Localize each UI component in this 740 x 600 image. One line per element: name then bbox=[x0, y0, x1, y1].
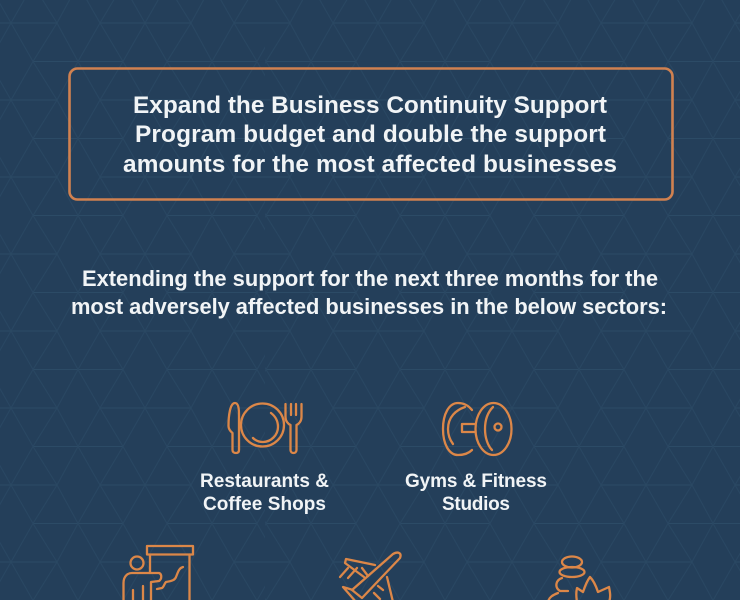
icon: plate with knife and fork bbox=[228, 403, 302, 453]
callout heading text: Program budget and double the support bbox=[135, 121, 606, 148]
icon: spa stones and lotus bbox=[548, 556, 610, 600]
label: Coffee Shops bbox=[203, 494, 326, 515]
label: Restaurants & bbox=[200, 471, 329, 492]
panel: main recommendation callout bbox=[70, 68, 672, 200]
label: Gyms & Fitness bbox=[405, 471, 547, 492]
sector: restaurants and coffee shops bbox=[200, 403, 329, 515]
icon: presenter with chart board bbox=[124, 546, 193, 600]
subheading text: most adversely affected businesses in the below sectors: bbox=[71, 294, 667, 319]
subheading text: Extending the support for the next three months for the bbox=[82, 266, 658, 291]
label: Studios bbox=[442, 494, 510, 515]
subheading text bbox=[71, 266, 667, 319]
icon: dumbbell bbox=[443, 403, 512, 455]
icon: airplane bbox=[340, 553, 401, 600]
callout heading text: amounts for the most affected businesses bbox=[123, 151, 617, 178]
callout heading text: Expand the Business Continuity Support bbox=[133, 92, 607, 119]
sector: gyms and fitness studios bbox=[405, 403, 547, 515]
label bbox=[405, 471, 547, 515]
label bbox=[200, 471, 329, 515]
callout heading text bbox=[123, 92, 617, 178]
